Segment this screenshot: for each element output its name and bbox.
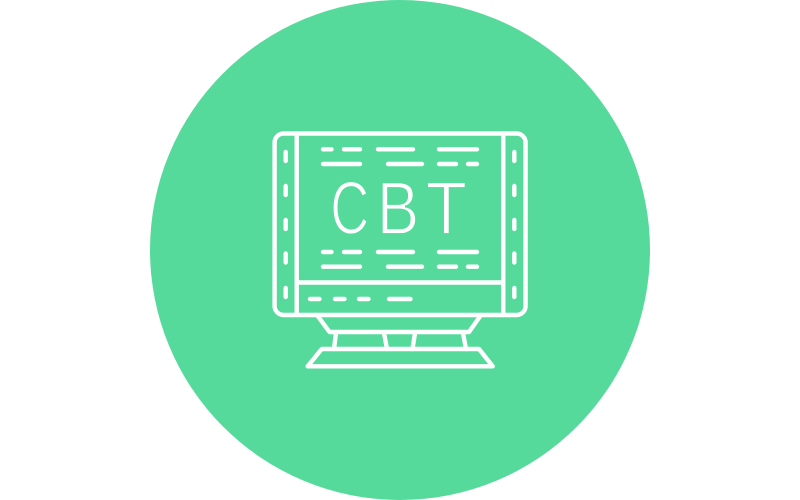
keyboard base [308,349,493,366]
icon: CBT computer monitor [275,134,526,366]
right film strip dashes [512,152,516,297]
stand legs [334,333,466,349]
monitor stand [317,315,481,332]
left film strip dashes [284,152,288,297]
CBT lettering: C [330,166,369,250]
lower text lines [323,252,477,267]
bottom bar dashes [310,297,410,301]
screen dividers [297,134,503,315]
upper text lines [323,149,477,164]
green background circle [150,0,650,500]
CBT lettering: T [426,167,467,251]
monitor frame [275,134,526,315]
CBT lettering [330,166,467,251]
CBT lettering: B [377,166,419,250]
